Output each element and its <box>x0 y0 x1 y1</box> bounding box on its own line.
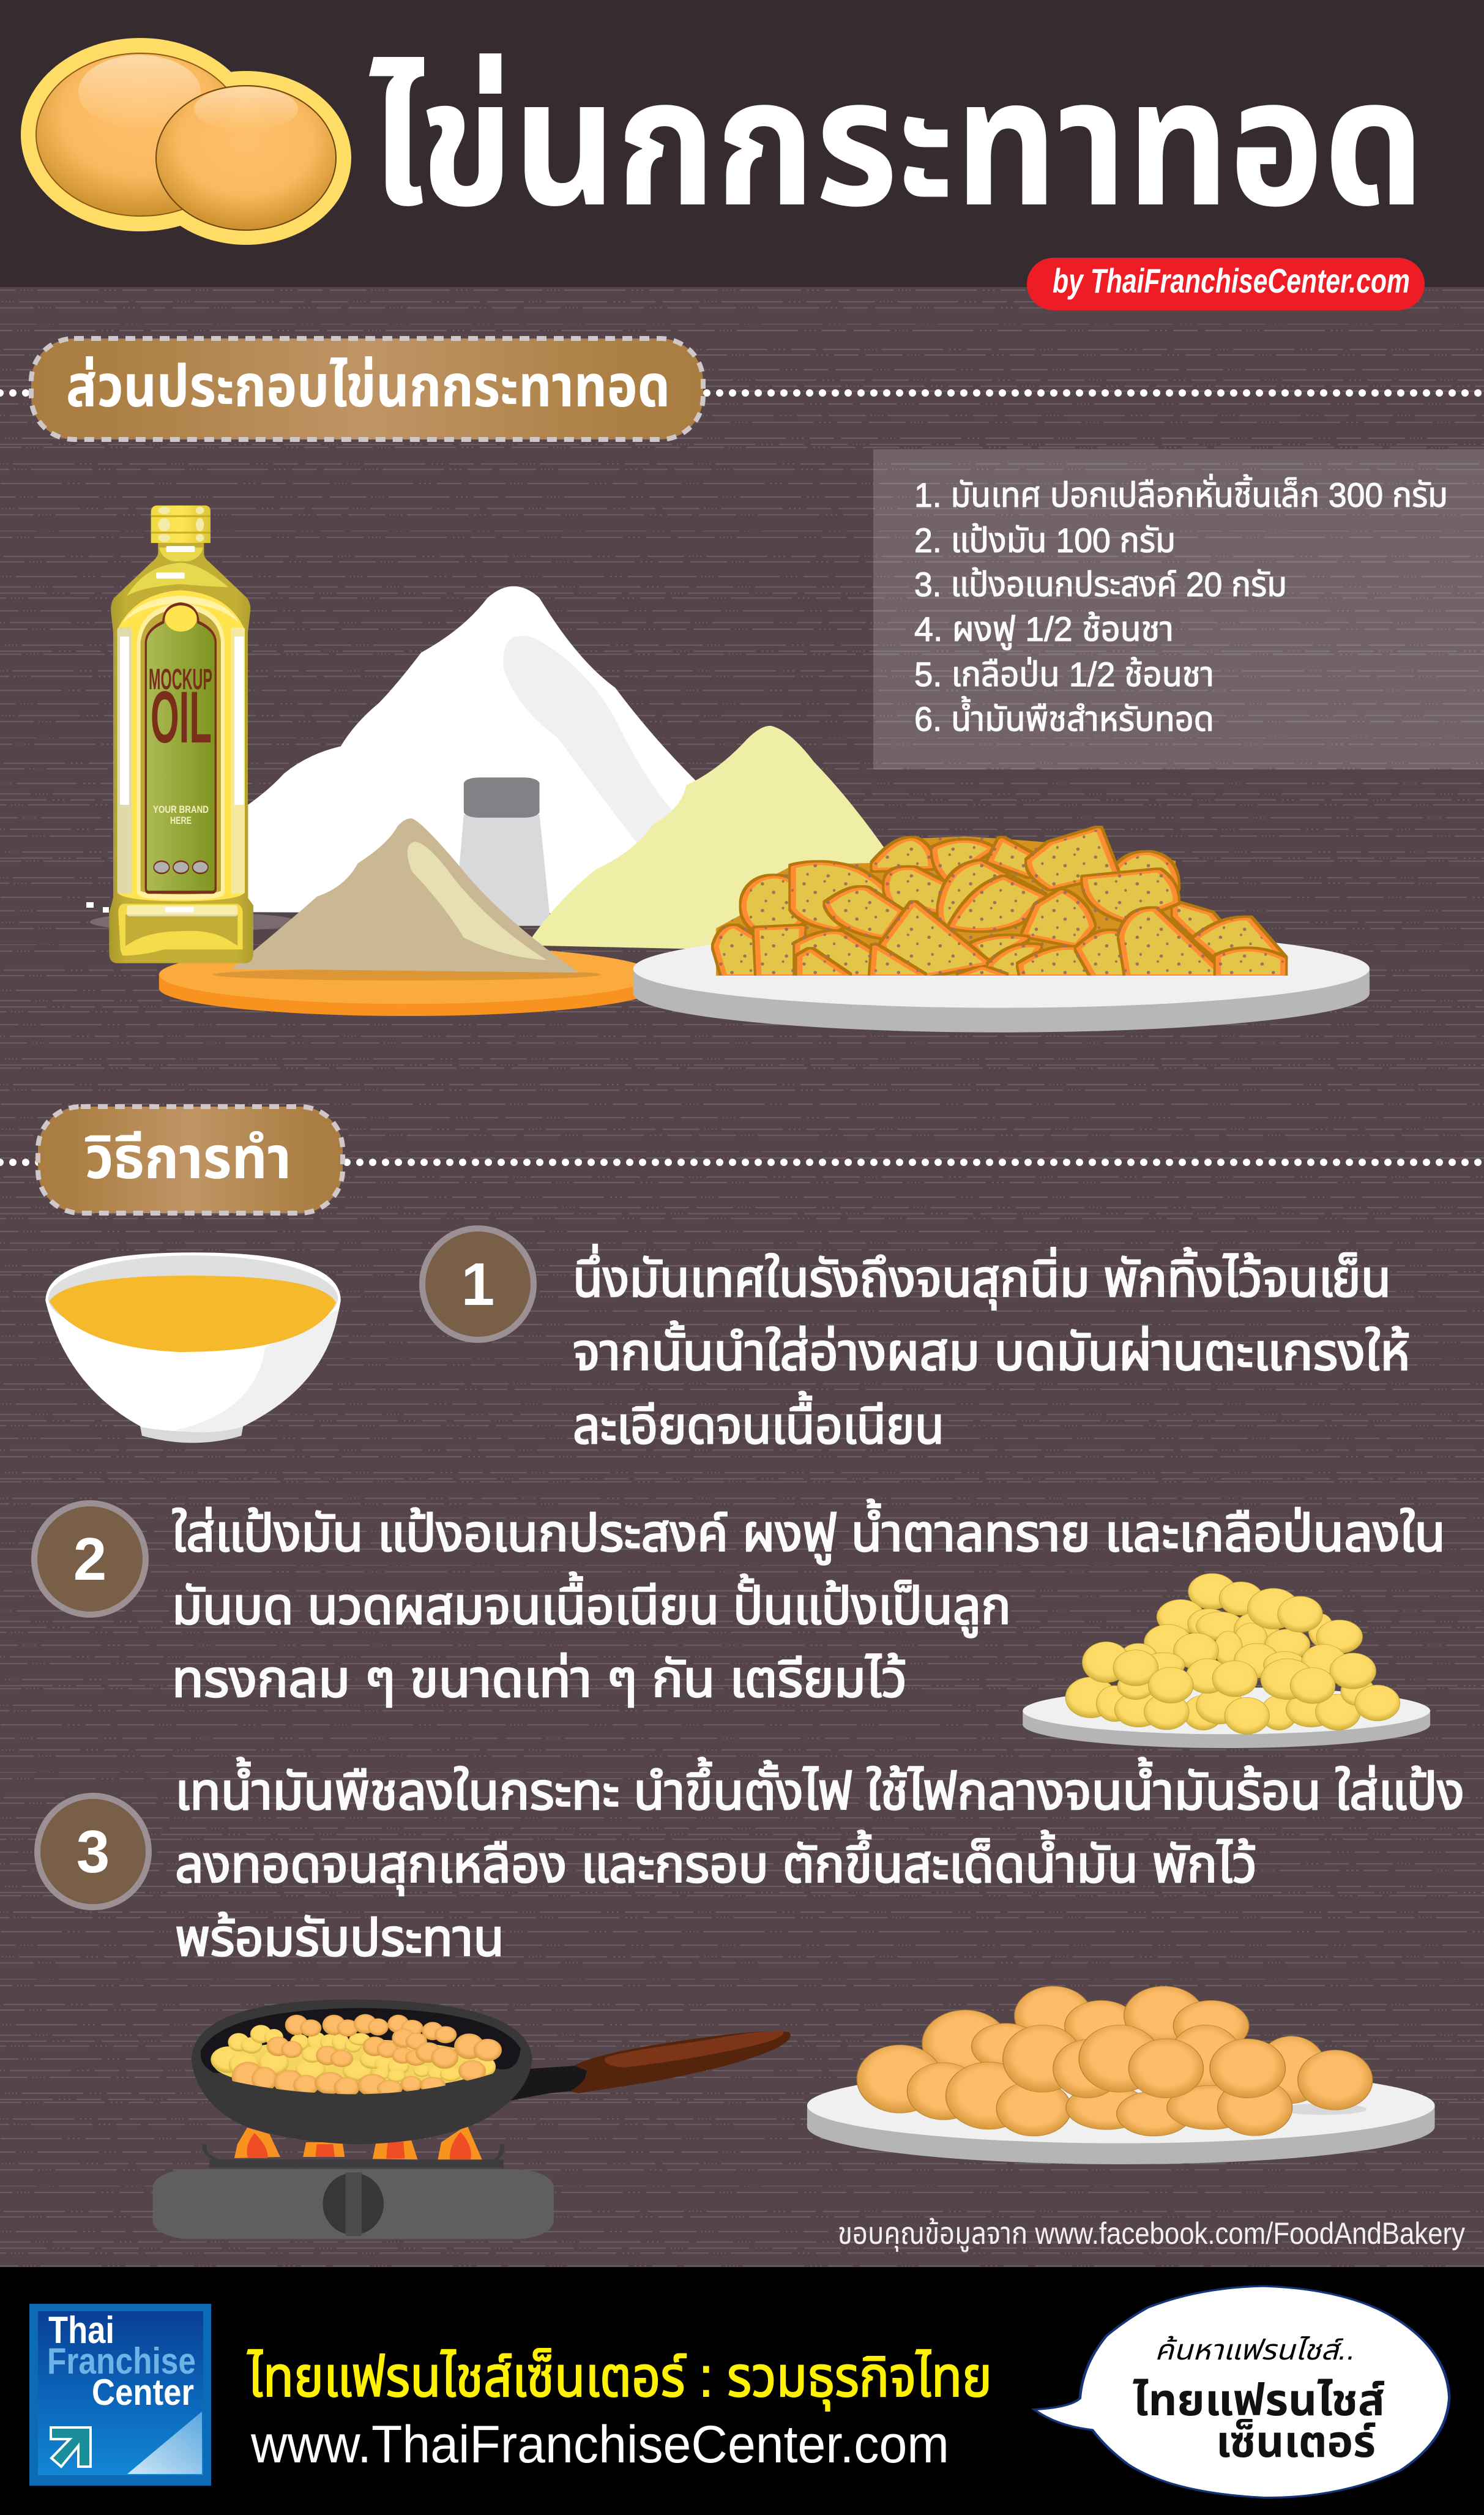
footer url: www.ThaiFranchiseCenter.com <box>250 2415 949 2474</box>
ingredient 3: 3. แป้งอเนกประสงค์ 20 กรัม <box>914 565 1287 604</box>
oil bottle: YOUR BRAND <box>153 804 209 815</box>
step 1 <box>422 1228 1410 1454</box>
ingredient 1: 1. มันเทศ ปอกเปลือกหั่นชิ้นเล็ก 300 กรัม <box>914 474 1448 514</box>
speech bubble: ค้นหาแฟรนไชส์.. <box>1155 2334 1355 2366</box>
icon: two quail eggs <box>21 38 351 245</box>
icon: bowl of oil <box>45 1252 341 1443</box>
step 1 badge <box>422 1228 534 1340</box>
logo: Thai Franchise Center: Thai <box>48 2309 114 2352</box>
flour mound <box>90 586 719 932</box>
illustration: fried balls on plate <box>807 1986 1435 2164</box>
oil bottle: MOCKUP <box>149 663 212 696</box>
step 2 <box>34 1499 1445 1708</box>
oil bottle: HERE <box>170 815 192 826</box>
illustration: frying pan on stove <box>153 2000 791 2239</box>
panel: ingredient list <box>873 449 1484 769</box>
illustration: ingredients <box>86 506 1370 1033</box>
logo: Thai Franchise Center: Center <box>92 2372 194 2413</box>
step 3 text: ลงทอดจนสุกเหลือง และกรอบ ตักขึ้นสะเด็ดน้ำมัน พักไว้ <box>175 1830 1257 1896</box>
pan body <box>192 2000 587 2144</box>
credit badge <box>1027 258 1425 310</box>
step 2 badge <box>34 1503 146 1615</box>
heading: method: วิธีการทำ <box>85 1126 291 1191</box>
speech bubble: ไทยแฟรนไชส์ <box>1133 2376 1385 2425</box>
flames <box>234 2125 482 2159</box>
step 3 badge <box>37 1796 149 1907</box>
oil bottle <box>109 506 253 963</box>
step 1 text: ละเอียดจนเนื้อเนียน <box>573 1391 944 1454</box>
tan powder mound <box>232 818 580 973</box>
step 1 badge: 1 <box>461 1250 494 1318</box>
step 2 badge: 2 <box>73 1525 106 1593</box>
step 1 text: จากนั้นนำใส่อ่างผสม บดมันผ่านตะแกรงให้ <box>573 1321 1410 1381</box>
stove <box>153 2144 554 2239</box>
step 1 text <box>573 1244 1410 1454</box>
ingredient 5: 5. เกลือป่น 1/2 ช้อนชา <box>914 655 1214 693</box>
potato wedges <box>711 826 1288 976</box>
step 3 text: พร้อมรับประทาน <box>175 1909 504 1967</box>
step 3 badge: 3 <box>76 1818 110 1885</box>
step 3 text: เทน้ำมันพืชลงในกระทะ นำขึ้นตั้งไฟ ใช้ไฟกลางจนน้ำมันร้อน ใส่แป้ง <box>175 1757 1464 1820</box>
step 3 <box>37 1757 1464 1967</box>
orange board <box>159 945 655 1016</box>
ingredient 2: 2. แป้งมัน 100 กรัม <box>914 521 1176 559</box>
footer band <box>0 2267 1484 2515</box>
ingredient 4: 4. ผงฟู 1/2 ช้อนชา <box>914 610 1174 650</box>
step 2 text <box>172 1499 1445 1708</box>
heading: ingredients: ส่วนประกอบไข่นกกระทาทอด <box>66 354 670 419</box>
step 2 text: มันบด นวดผสมจนเนื้อเนียน ปั้นแป้งเป็นลูก <box>172 1572 1011 1637</box>
logo: Thai Franchise Center <box>29 2304 211 2486</box>
salt shaker <box>454 777 551 926</box>
step 1 text: นึ่งมันเทศในรังถึงจนสุกนิ่ม พักทิ้งไว้จนเย็น <box>573 1244 1391 1310</box>
speech bubble <box>1034 2286 1449 2498</box>
footer headline: ไทยแฟรนไชส์เซ็นเตอร์ : รวมธุรกิจไทย <box>247 2346 992 2411</box>
heading: ingredients <box>31 338 703 439</box>
pan handle <box>570 2031 791 2093</box>
divider: method dotted line <box>0 1159 1484 1166</box>
yellow flour mound <box>526 726 890 953</box>
background body <box>0 287 1484 2267</box>
logo: Thai Franchise Center: Franchise <box>47 2341 196 2382</box>
speech bubble: เซ็นเตอร์ <box>1216 2418 1376 2467</box>
fried and raw balls in pan <box>211 2014 502 2098</box>
step 3 text <box>175 1757 1464 1967</box>
step 2 text: ทรงกลม ๆ ขนาดเท่า ๆ กัน เตรียมไว้ <box>172 1650 907 1708</box>
illustration: raw dough balls on plate <box>1023 1574 1430 1748</box>
divider: ingredients dotted line <box>0 389 1484 397</box>
header band <box>0 0 1484 310</box>
white plate <box>633 930 1370 1033</box>
ingredient 6: 6. น้ำมันพืชสำหรับทอด <box>914 696 1214 738</box>
heading: method <box>38 1107 343 1213</box>
step 2 text: ใส่แป้งมัน แป้งอเนกประสงค์ ผงฟู น้ำตาลทราย และเกลือป่นลงใน <box>172 1499 1445 1564</box>
spilled salt flakes <box>86 902 109 913</box>
oil bottle: OIL <box>151 676 212 758</box>
